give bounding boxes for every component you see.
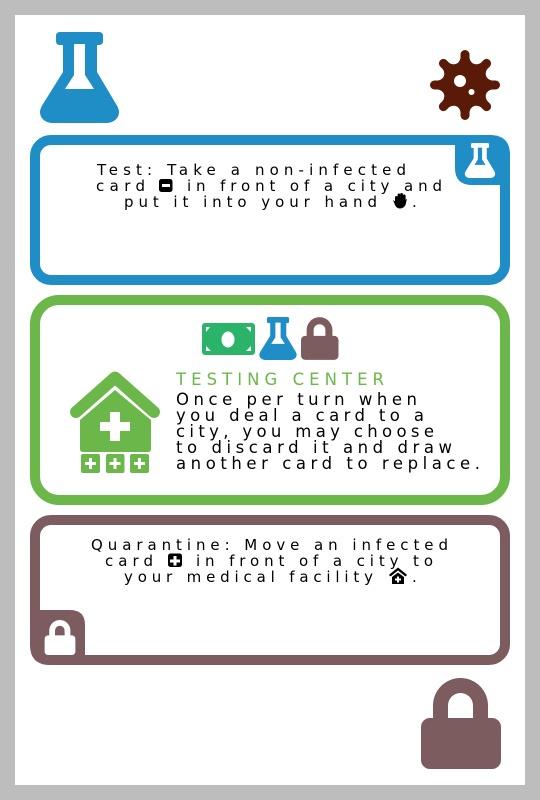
testing center body text: another card to replace. [176, 454, 480, 473]
icon: large lock [421, 678, 501, 769]
quarantine rule text [91, 536, 448, 586]
testing center body text: Once per turn when [176, 390, 417, 409]
heading: testing center: TESTING CENTER [175, 370, 384, 389]
testing center body text: to discard it and draw [176, 438, 452, 457]
panel: test [35, 135, 510, 280]
icon: minus card [159, 179, 172, 192]
test rule text: put it into your hand [124, 193, 377, 211]
test rule text [96, 161, 442, 211]
testing center body text: you deal a card to a [176, 406, 424, 425]
testing center body text: city, you may choose [176, 422, 434, 441]
icon: small flask [259, 317, 297, 360]
icon tab: flask [455, 135, 510, 185]
quarantine rule text: your medical facility [124, 568, 373, 586]
test rule text: Test: Take a non-infected [96, 161, 406, 179]
icon: medical house [76, 378, 154, 473]
quarantine rule text: . [412, 568, 417, 586]
icon: hand [393, 193, 407, 208]
icon tab: lock [30, 610, 85, 665]
icon: plus card [168, 554, 182, 567]
quarantine rule text: Quarantine: Move an infected [91, 536, 448, 554]
quarantine rule text: in front of a city to [196, 552, 433, 570]
icon: small medical house [390, 569, 406, 584]
test rule text: card [96, 177, 145, 195]
test rule text: in front of a city and [187, 177, 442, 195]
icon: large flask [40, 32, 119, 123]
icon: money [202, 323, 255, 355]
quarantine rule text: card [105, 552, 153, 570]
testing center body text [176, 390, 480, 473]
panel: quarantine [30, 520, 505, 665]
icon: small lock [301, 317, 338, 360]
panel: testing center [35, 300, 505, 500]
icon: virus [430, 50, 500, 120]
test rule text: . [412, 193, 417, 211]
